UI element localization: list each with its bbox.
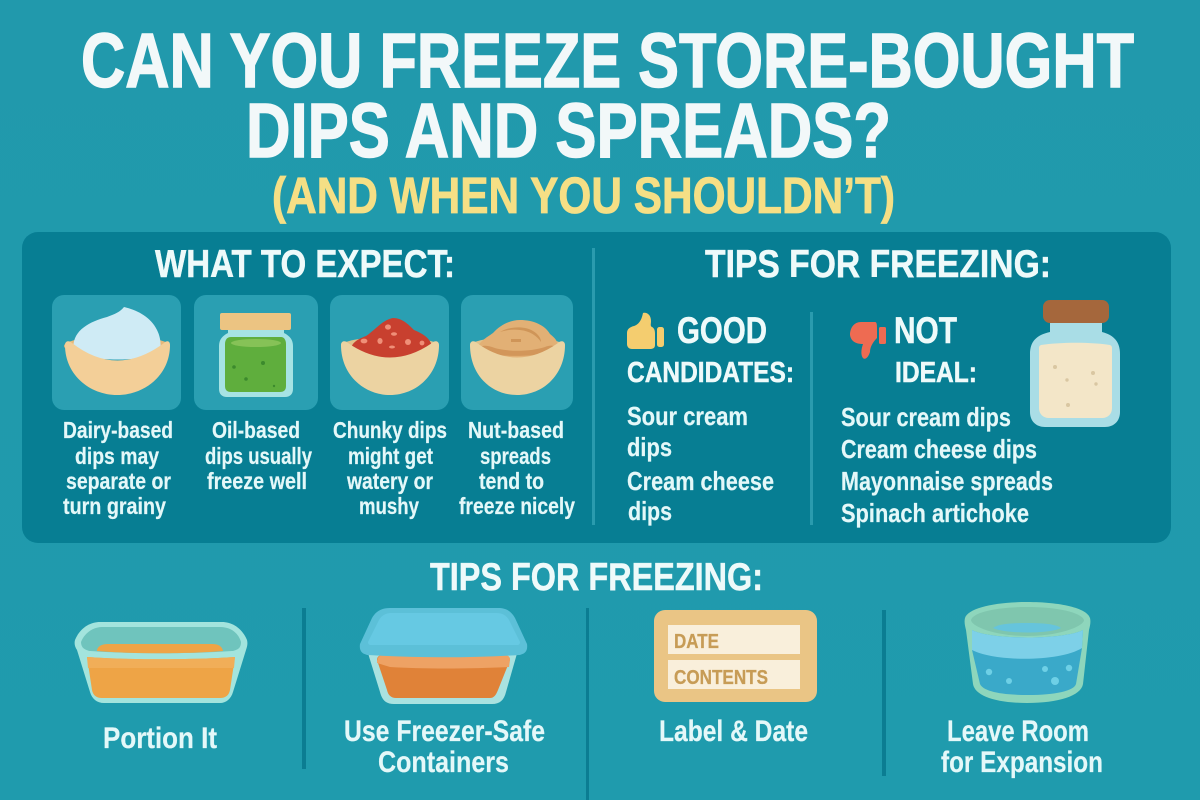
text: nut-based: Nut-based xyxy=(468,417,564,443)
list: good candidates: dips xyxy=(628,496,672,526)
heading: not ideal xyxy=(894,310,977,389)
icon: thumbs down xyxy=(850,322,886,359)
tile: chunky xyxy=(330,295,449,410)
list: not ideal: Spinach artichoke xyxy=(841,498,1029,528)
heading: not ideal: NOT xyxy=(894,310,957,351)
text: freezer-safe: Use Freezer-Safe xyxy=(344,715,545,748)
text: oil-based xyxy=(205,417,312,494)
icon: glass with expansion room xyxy=(965,602,1090,703)
heading: tips for freezing (bottom): TIPS FOR FREEZING: xyxy=(430,556,763,599)
text: oil-based: Oil-based xyxy=(212,417,300,443)
icon: portion tub xyxy=(75,622,247,703)
list: not ideal: Cream cheese dips xyxy=(841,434,1037,464)
panel: what to expect and tips xyxy=(22,232,1171,543)
title xyxy=(81,18,1134,224)
text: dairy-based: Dairy-based xyxy=(63,417,173,443)
list: not ideal xyxy=(841,402,1053,528)
text: chunky xyxy=(333,417,447,519)
text: chunky: Chunky dips xyxy=(333,417,447,443)
text: dairy-based xyxy=(63,417,173,519)
title: DIPS AND SPREADS? xyxy=(246,88,891,174)
list: good candidates: Cream cheese xyxy=(627,466,774,496)
heading: what to expect: WHAT TO EXPECT: xyxy=(155,243,455,286)
text: oil-based: freeze well xyxy=(207,468,307,494)
text: leave room: Leave Room xyxy=(947,715,1089,748)
text: nut-based xyxy=(459,417,575,519)
heading: not ideal: IDEAL: xyxy=(895,357,977,389)
text: leave room: for Expansion xyxy=(941,746,1103,779)
icon: label and date: CONTENTS xyxy=(674,667,768,689)
text: chunky: mushy xyxy=(359,493,419,519)
list: not ideal: Mayonnaise spreads xyxy=(841,466,1053,496)
text: nut-based: spreads xyxy=(480,443,551,469)
text: oil-based: dips usually xyxy=(205,443,312,469)
icon: thumbs up xyxy=(627,313,664,349)
text: portion it: Portion It xyxy=(103,722,217,755)
heading: good candidates: CANDIDATES: xyxy=(627,357,794,389)
text: label and date: Label & Date xyxy=(659,715,808,748)
icon: freezer-safe container xyxy=(360,608,527,704)
text: dairy-based: separate or xyxy=(66,468,171,494)
heading: good candidates: GOOD xyxy=(677,310,767,351)
heading: good candidates xyxy=(627,310,794,389)
list: good candidates: dips xyxy=(627,432,672,462)
heading: tips for freezing (panel): TIPS FOR FREEZING: xyxy=(705,243,1051,286)
list: not ideal: Sour cream dips xyxy=(841,402,1011,432)
icon: jar xyxy=(1030,300,1120,427)
text: freezer-safe xyxy=(344,715,545,779)
text: chunky: might get xyxy=(348,443,433,469)
icon: label and date xyxy=(654,610,817,702)
tile: nut-based xyxy=(461,295,573,410)
list: good candidates: Sour cream xyxy=(627,401,748,431)
list: good candidates xyxy=(627,401,774,526)
text: dairy-based: dips may xyxy=(75,443,159,469)
subtitle: (AND WHEN YOU SHOULDN’T) xyxy=(272,167,895,224)
text: freezer-safe: Containers xyxy=(378,746,509,779)
text: chunky: watery or xyxy=(346,468,433,494)
icon: label and date: DATE xyxy=(674,631,719,653)
tile: dairy-based xyxy=(52,295,181,410)
text: dairy-based: turn grainy xyxy=(63,493,166,519)
tile: oil-based xyxy=(194,295,318,410)
text: nut-based: freeze nicely xyxy=(459,493,575,519)
text: leave room xyxy=(941,715,1103,779)
text: nut-based: tend to xyxy=(479,468,544,494)
